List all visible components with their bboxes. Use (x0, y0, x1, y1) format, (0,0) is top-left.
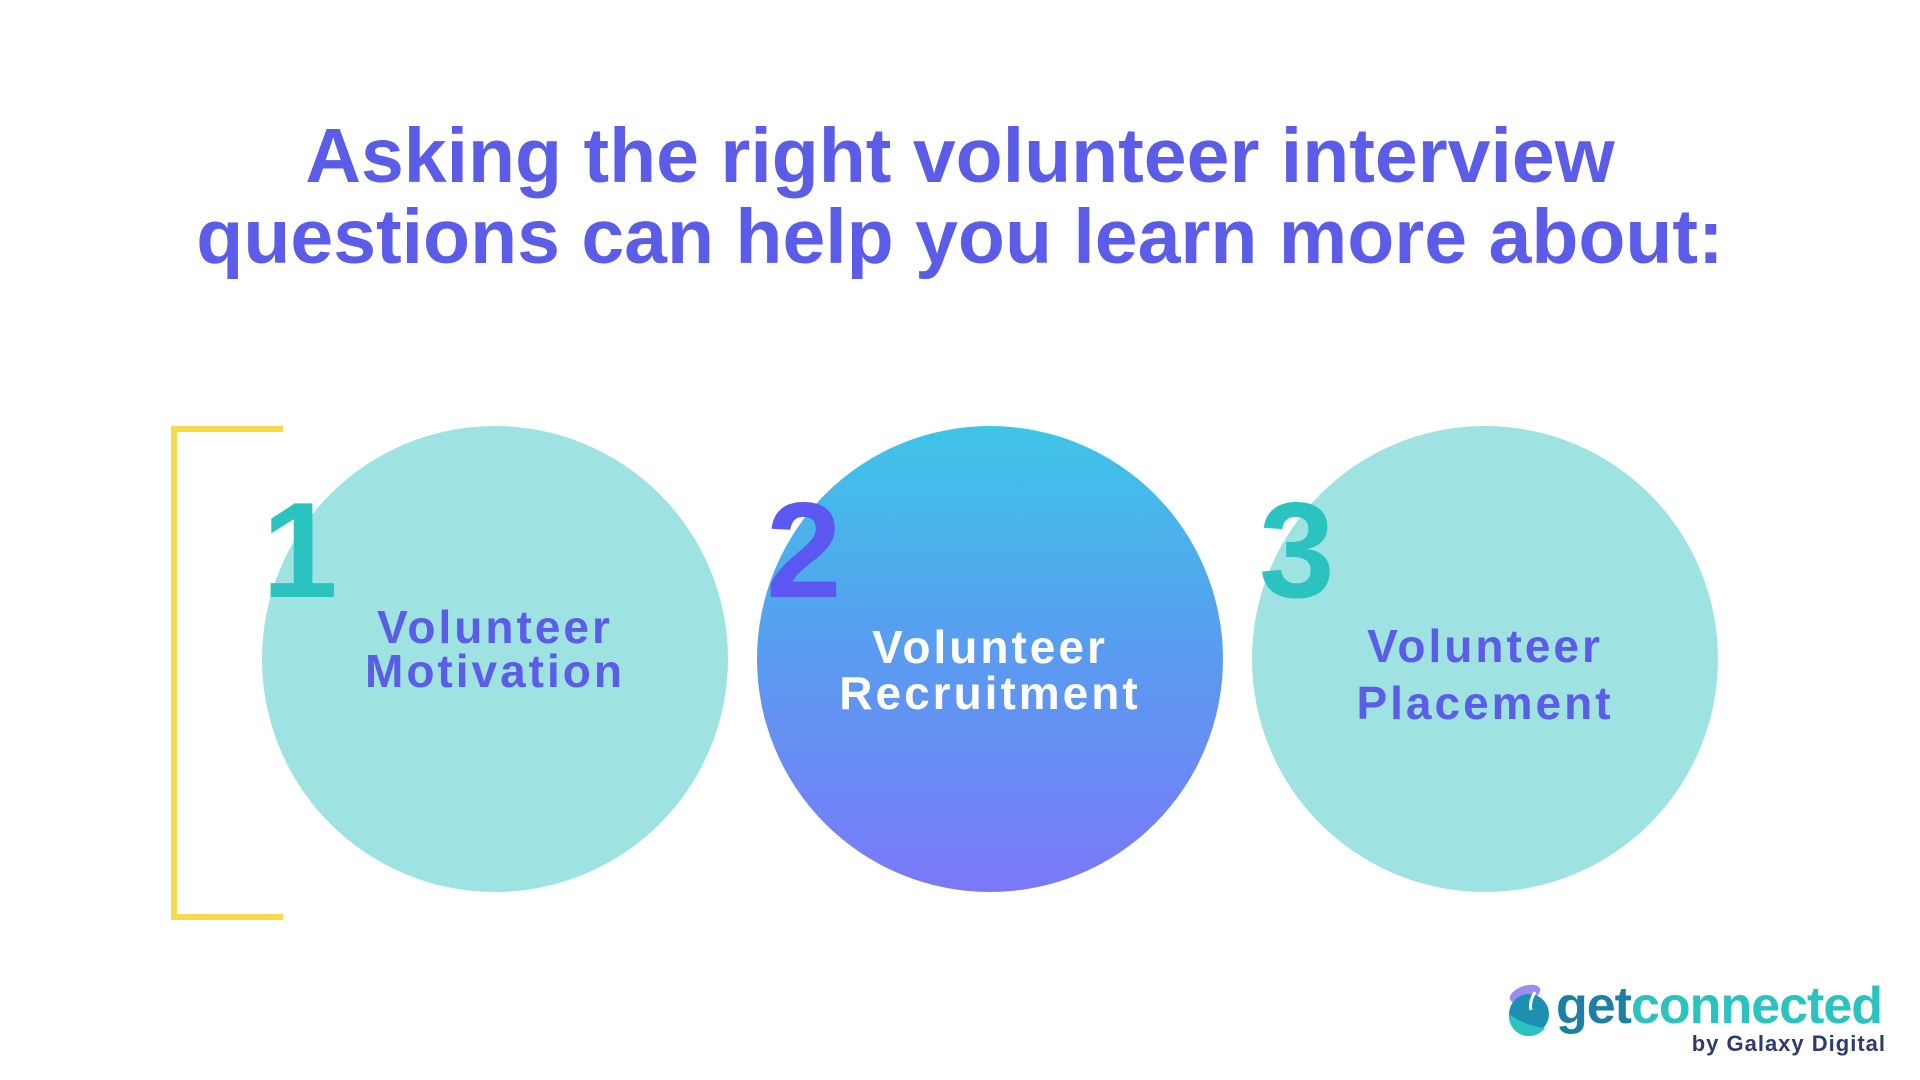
bracket (171, 426, 283, 920)
title (196, 113, 1724, 280)
label: motivation (365, 601, 625, 697)
panel: circle 2 (757, 426, 1223, 892)
number 1: 1 (262, 474, 338, 626)
label: recruitment (839, 621, 1141, 719)
panel: circle 1 (262, 426, 728, 892)
logo wordmark: getconnected (1556, 977, 1882, 1035)
panel: circle 3 (1252, 426, 1718, 892)
label: placement: Volunteer (1367, 620, 1603, 672)
number 3: 3 (1259, 474, 1335, 626)
title: questions can help you learn more about: (196, 194, 1724, 280)
logo (1508, 977, 1886, 1056)
label: recruitment: Recruitment (839, 667, 1141, 719)
icon: logo mark (1508, 984, 1549, 1036)
logo tagline: by Galaxy Digital (1692, 1031, 1886, 1056)
label: motivation: Volunteer (377, 601, 613, 653)
label: motivation: Motivation (365, 645, 625, 697)
label: placement (1356, 620, 1614, 729)
label: placement: Placement (1356, 677, 1614, 729)
number 2: 2 (766, 474, 842, 626)
title: Asking the right volunteer interview (305, 113, 1615, 199)
label: recruitment: Volunteer (872, 621, 1108, 673)
